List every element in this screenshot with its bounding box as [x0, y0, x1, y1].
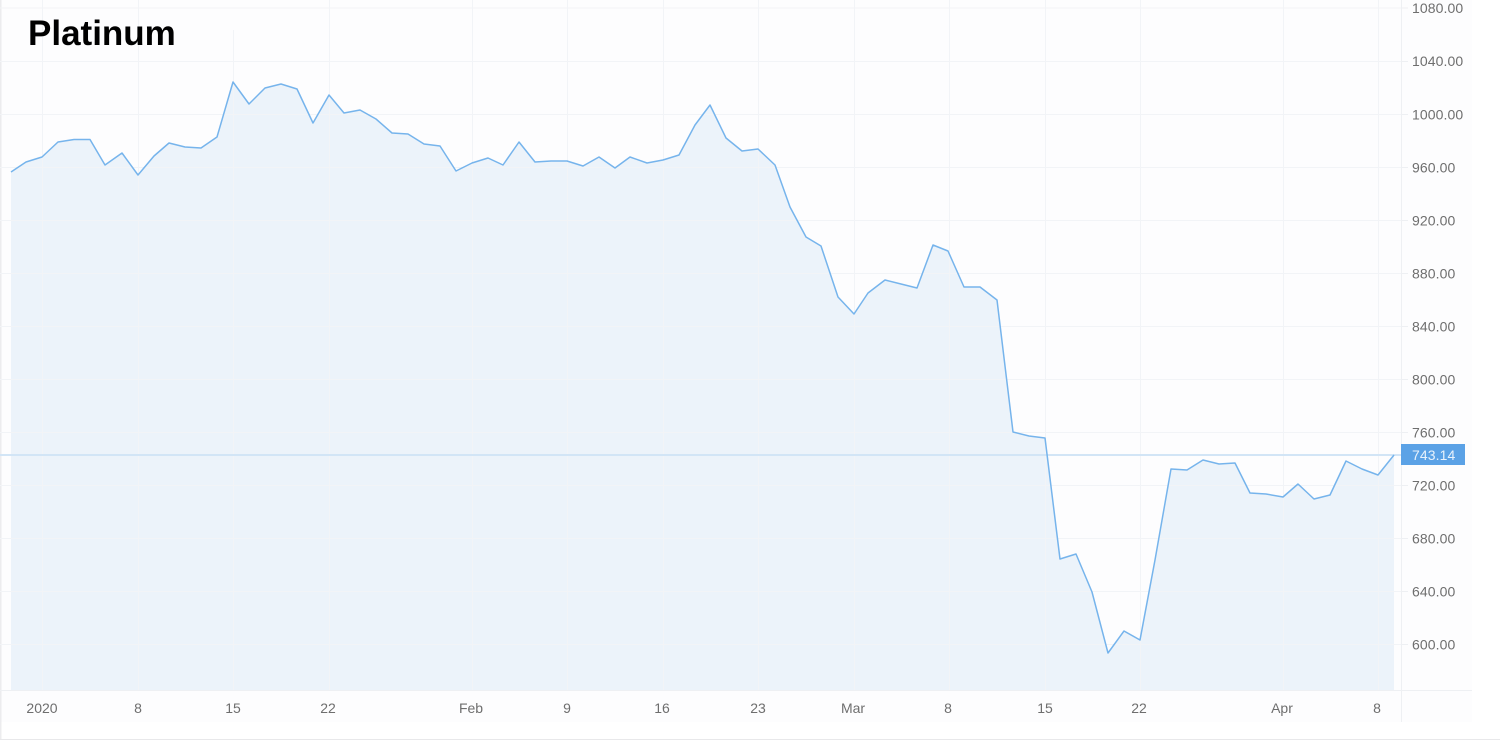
x axis labels: 2020	[26, 700, 58, 716]
x axis labels: 9	[563, 700, 571, 716]
y axis labels: 1000.00	[1412, 106, 1463, 122]
y axis labels: 680.00	[1412, 530, 1456, 546]
x axis labels: Apr	[1271, 700, 1293, 716]
x axis labels: 22	[1131, 700, 1147, 716]
x axis labels: 22	[320, 700, 336, 716]
y axis labels: 760.00	[1412, 424, 1456, 440]
y axis labels: 1080.00	[1412, 0, 1463, 16]
platinum price line	[11, 82, 1394, 653]
y axis labels: 920.00	[1412, 212, 1456, 228]
current price tag: 743.14	[1412, 447, 1456, 463]
x axis labels: 8	[944, 700, 952, 716]
y axis labels: 640.00	[1412, 584, 1456, 600]
y axis labels: 960.00	[1412, 160, 1456, 176]
y axis labels: 800.00	[1412, 372, 1456, 388]
x axis labels: 8	[1373, 700, 1381, 716]
title: Platinum	[28, 14, 176, 53]
current price line	[0, 454, 1401, 456]
y axis labels: 880.00	[1412, 266, 1456, 282]
x axis labels: Feb	[459, 700, 483, 716]
y axis labels: 840.00	[1412, 318, 1456, 334]
y axis labels: 720.00	[1412, 478, 1456, 494]
y axis labels: 600.00	[1412, 636, 1456, 652]
x axis labels	[26, 700, 1381, 716]
x axis labels: 15	[1037, 700, 1053, 716]
x axis labels: 8	[134, 700, 142, 716]
x axis labels: 23	[750, 700, 766, 716]
x axis labels: 15	[225, 700, 241, 716]
x axis labels: 16	[654, 700, 670, 716]
area fill under price	[11, 82, 1394, 690]
y axis labels: 1040.00	[1412, 53, 1463, 69]
x axis labels: Mar	[841, 700, 865, 716]
y axis labels	[1412, 0, 1463, 652]
current price tag	[1401, 444, 1465, 465]
